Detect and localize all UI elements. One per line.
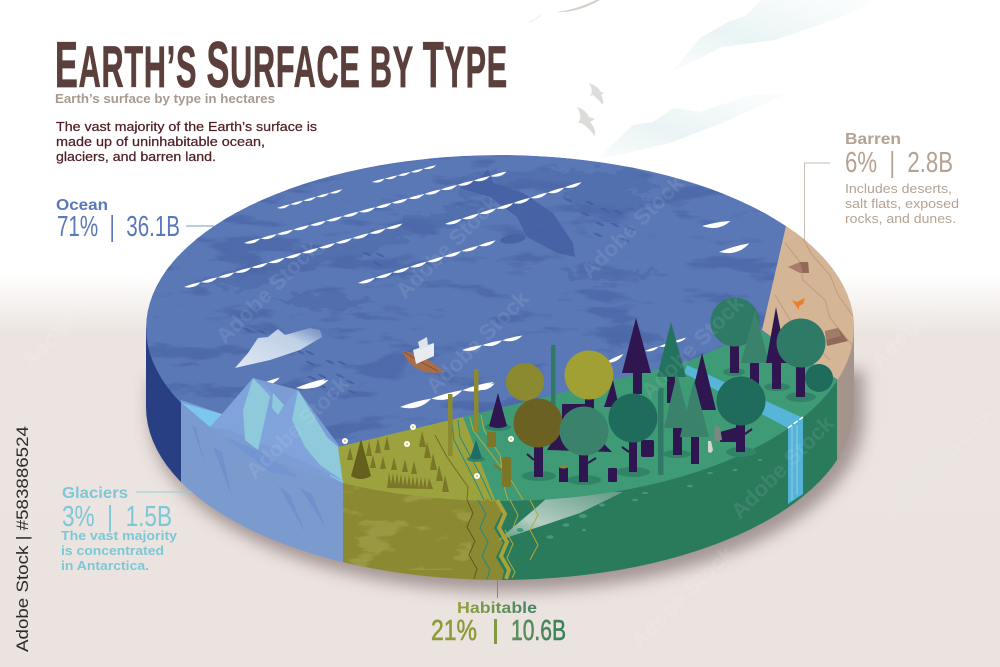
callout: habitable: 21%	[431, 615, 477, 647]
whale	[460, 169, 575, 257]
rabbit	[708, 441, 713, 453]
cloud: top right	[672, 0, 878, 72]
green bar 2	[658, 388, 664, 475]
cloud: above disk	[596, 93, 790, 160]
panel: disk top surface	[146, 155, 870, 520]
green bar 1	[551, 345, 556, 407]
panel: disk side walls	[146, 328, 854, 580]
callout: barren: Includes deserts,	[845, 182, 952, 196]
side: barren	[837, 330, 854, 460]
teal cone tree front 1	[664, 373, 691, 455]
large cone tree	[351, 439, 371, 479]
callout: barren: salt flats, exposed	[845, 197, 959, 211]
purple cone middle	[604, 380, 619, 407]
fish schools	[243, 198, 635, 394]
callout: ocean: 71% | 36.1B	[57, 211, 180, 243]
callout: glaciers: Glaciers	[62, 485, 128, 502]
callout: barren: rocks, and dunes.	[845, 212, 956, 226]
ship	[402, 337, 445, 373]
stump purple small 1	[559, 466, 568, 482]
flowers	[342, 424, 514, 479]
glacier facets on wall	[192, 425, 326, 534]
olive stump 1	[487, 432, 496, 447]
stump purple small 2	[608, 468, 617, 482]
callout: glaciers: 3% | 1.5B	[62, 501, 172, 533]
faint repeating watermark: Adobe Stock	[636, 290, 749, 404]
wave rows	[184, 165, 751, 412]
back purple cone tree	[766, 307, 787, 389]
callout: ocean	[56, 197, 214, 243]
small dark round tree	[805, 364, 833, 392]
olive round tree	[506, 363, 544, 401]
glacier surface	[181, 378, 341, 482]
barren rock 2	[825, 328, 848, 346]
faint repeating watermark: Adobe Stock	[626, 540, 739, 654]
yellow round tree	[564, 350, 614, 415]
faint repeating watermark: Adobe Stock	[191, 80, 304, 194]
callout: barren: Barren	[845, 131, 901, 148]
habitable green surface	[463, 330, 838, 501]
right round tree	[776, 318, 826, 397]
mountain body	[210, 378, 341, 480]
faint repeating watermark: Adobe Stock	[16, 260, 129, 374]
waterfall highlights	[792, 425, 797, 500]
small teal cone	[470, 440, 482, 460]
sky ice left	[182, 403, 222, 427]
grass comb	[387, 472, 433, 489]
big purple cone tree	[622, 318, 651, 394]
barren land surface	[762, 226, 854, 382]
back purple rock	[547, 404, 612, 452]
ice edge right	[330, 442, 343, 483]
panel: glacier mountains	[182, 378, 343, 483]
faint repeating watermark: Adobe Stock	[576, 170, 689, 284]
back chunk right	[720, 425, 745, 442]
waterfall	[788, 417, 803, 504]
callout: barren	[804, 131, 959, 240]
callout: barren: 6% | 2.8B	[845, 147, 953, 179]
back round tree	[710, 298, 760, 373]
callout: glaciers	[61, 485, 192, 573]
panel: forest	[467, 298, 833, 487]
ocean mottled texture	[148, 156, 850, 465]
waterfall foam	[788, 417, 803, 428]
callout: glaciers: is concentrated	[61, 544, 164, 558]
teal round tree	[560, 406, 608, 482]
icon: seagulls	[528, 0, 604, 136]
callout: ocean: Ocean	[56, 197, 108, 214]
intro text block: The vast majority of the Earth’s surface is	[56, 119, 318, 134]
side: habitable olive	[343, 483, 504, 580]
title: EARTH’S SURFACE BY TYPE	[55, 28, 508, 101]
side: olive texture	[343, 480, 471, 570]
callout: habitable: Habitable	[457, 600, 537, 617]
tall olive bars	[448, 369, 478, 456]
stump purple large	[641, 440, 654, 457]
callout: habitable	[431, 578, 566, 647]
barren contour lines	[775, 233, 856, 360]
ocean darker patches	[190, 170, 670, 348]
barren rock 1	[788, 262, 809, 273]
subtitle: Earth’s surface by type in hectares	[55, 92, 275, 106]
faint repeating watermark: Adobe Stock	[726, 410, 839, 524]
teal cone tree back	[657, 322, 686, 403]
intro text block	[56, 119, 318, 164]
contour lines on surface	[435, 415, 523, 500]
lower mountain facet	[225, 437, 300, 478]
tree shadows	[467, 368, 816, 485]
dark olive round tree	[514, 398, 562, 477]
ocean surface	[146, 155, 854, 501]
specks on green wall	[516, 459, 762, 539]
callout: habitable: 10.6B	[511, 615, 566, 647]
river	[684, 365, 803, 428]
front foam cloud	[497, 492, 623, 541]
dark teal round tree middle	[608, 394, 658, 472]
side: ocean	[146, 328, 182, 482]
intro text block: made up of uninhabitable ocean,	[56, 134, 265, 149]
panel: olive land details	[342, 369, 538, 579]
faint repeating watermark: Adobe Stock	[391, 190, 504, 304]
faint repeating watermark: Adobe Stock	[866, 260, 979, 374]
faint repeating watermark: Adobe Stock	[211, 235, 324, 349]
purple cone tree right	[688, 353, 716, 410]
small cone trees	[347, 431, 449, 492]
side: habitable green	[494, 381, 840, 580]
wall zigzags	[467, 500, 538, 579]
callout: glaciers: in Antarctica.	[61, 559, 149, 573]
faint repeating watermark: Adobe Stock	[241, 370, 354, 484]
iceberg	[235, 328, 322, 368]
small purple cone left	[489, 393, 507, 428]
disk drop shadow	[150, 370, 864, 591]
back teal cone tree	[741, 310, 769, 384]
faint repeating watermark: Adobe Stock	[421, 285, 534, 399]
faint repeating watermark: Adobe Stock	[886, 400, 999, 514]
side: glacier	[181, 403, 343, 562]
grey rock	[714, 425, 722, 441]
callout: glaciers: The vast majority	[61, 529, 177, 543]
light facets	[243, 378, 342, 480]
teal cone tree front 2	[680, 380, 709, 464]
habitable olive surface	[338, 417, 497, 505]
intro text block: glaciers, and barren land.	[56, 149, 216, 164]
fox	[792, 298, 805, 310]
olive stump 2	[494, 457, 511, 487]
stock id watermark: Adobe Stock | #583886524	[14, 426, 32, 652]
dark teal round tree right	[716, 376, 766, 452]
